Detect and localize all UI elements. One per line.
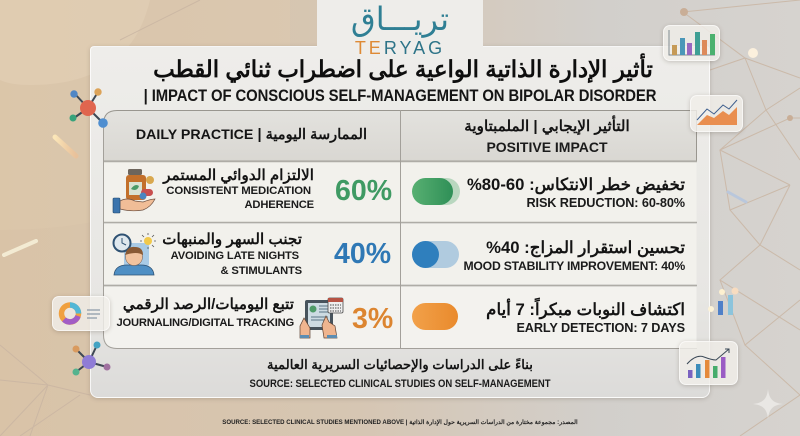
logo latin wordmark: TERYAG [355, 38, 445, 58]
icon: medication bottle in hand [112, 169, 156, 214]
card: bar chart [663, 25, 720, 61]
row 1: medication [112, 167, 392, 214]
logo panel [317, 0, 483, 58]
icon: molecule purple [72, 342, 110, 376]
source block: SOURCE: SELECTED CLINICAL STUDIES ON SELF-MANAGEMENT [250, 378, 550, 390]
sparkle icon [754, 390, 782, 418]
card: donut chart [52, 296, 110, 331]
stat: 60%: 60% [335, 175, 392, 207]
source block: بناءً على الدراسات والإحصائيات السريرية العالمية [267, 357, 533, 372]
row 3: early detection: EARLY DETECTION: 7 DAYS [516, 321, 685, 335]
icon: molecule orange [70, 88, 108, 128]
pill indicator: green [412, 178, 460, 205]
row 1: medication: CONSISTENT MEDICATION [166, 185, 311, 197]
impact text: تحسين استقرار المزاج: 40% [486, 238, 685, 257]
row 3: tracking: JOURNALING/DIGITAL TRACKING [116, 317, 294, 329]
footer note: SOURCE: SELECTED CLINICAL STUDIES MENTIONED ABOVE | المصدر: مجموعة مختارة من الدراسات السريرية حول الإدارة الذاتية [222, 419, 578, 426]
title arabic: تأثير الإدارة الذاتية الواعية على اضطراب ثنائي القطب [153, 56, 653, 82]
practice text: تجنب السهر والمنبهات [162, 231, 302, 248]
header: positive impact: التأثير الإيجابي | الملمبتاوية [464, 118, 630, 135]
row 2: sleep: & STIMULANTS [221, 265, 302, 277]
card: growth chart [679, 341, 738, 385]
stat: 3%: 3% [352, 303, 393, 335]
table frame [103, 110, 697, 349]
pill indicator: orange [412, 303, 458, 330]
row 3: early detection [412, 298, 685, 335]
impact text: اكتشاف النوبات مبكراً: 7 أيام [486, 300, 685, 319]
card: area chart [690, 95, 743, 132]
row 1: risk reduction [412, 175, 685, 210]
main panel [90, 46, 710, 398]
impact text: تخفيض خطر الانتكاس: 60-80% [467, 175, 685, 194]
header: positive impact [464, 115, 630, 155]
logo arabic wordmark: تريـــاق [351, 0, 449, 38]
header: positive impact: POSITIVE IMPACT [486, 139, 608, 155]
practice text: الالتزام الدوائي المستمر [163, 167, 314, 184]
icon: sleeper with clock and sun [112, 233, 156, 276]
row 1: risk reduction: RISK REDUCTION: 60-80% [526, 196, 685, 210]
source block [250, 357, 550, 390]
row 1: medication: ADHERENCE [244, 199, 314, 211]
row 2: sleep: AVOIDING LATE NIGHTS [171, 250, 299, 262]
title english: | IMPACT OF CONSCIOUS SELF-MANAGEMENT ON BIPOLAR DISORDER [144, 87, 656, 105]
icon: small glowing bars [708, 288, 738, 315]
comparison table [103, 110, 697, 349]
row 2: sleep [112, 231, 391, 277]
practice text: تتبع اليوميات/الرصد الرقمي [123, 296, 294, 313]
pill indicator: blue [412, 241, 459, 268]
header: daily practice: الممارسة اليومية | DAILY PRACTICE [136, 127, 367, 143]
row 2: mood stability: MOOD STABILITY IMPROVEMENT: 40% [463, 259, 685, 273]
icon: tablet with calendar [300, 298, 344, 338]
row 2: mood stability [412, 238, 685, 273]
stat: 40%: 40% [334, 238, 391, 270]
row 3: tracking [116, 296, 393, 338]
